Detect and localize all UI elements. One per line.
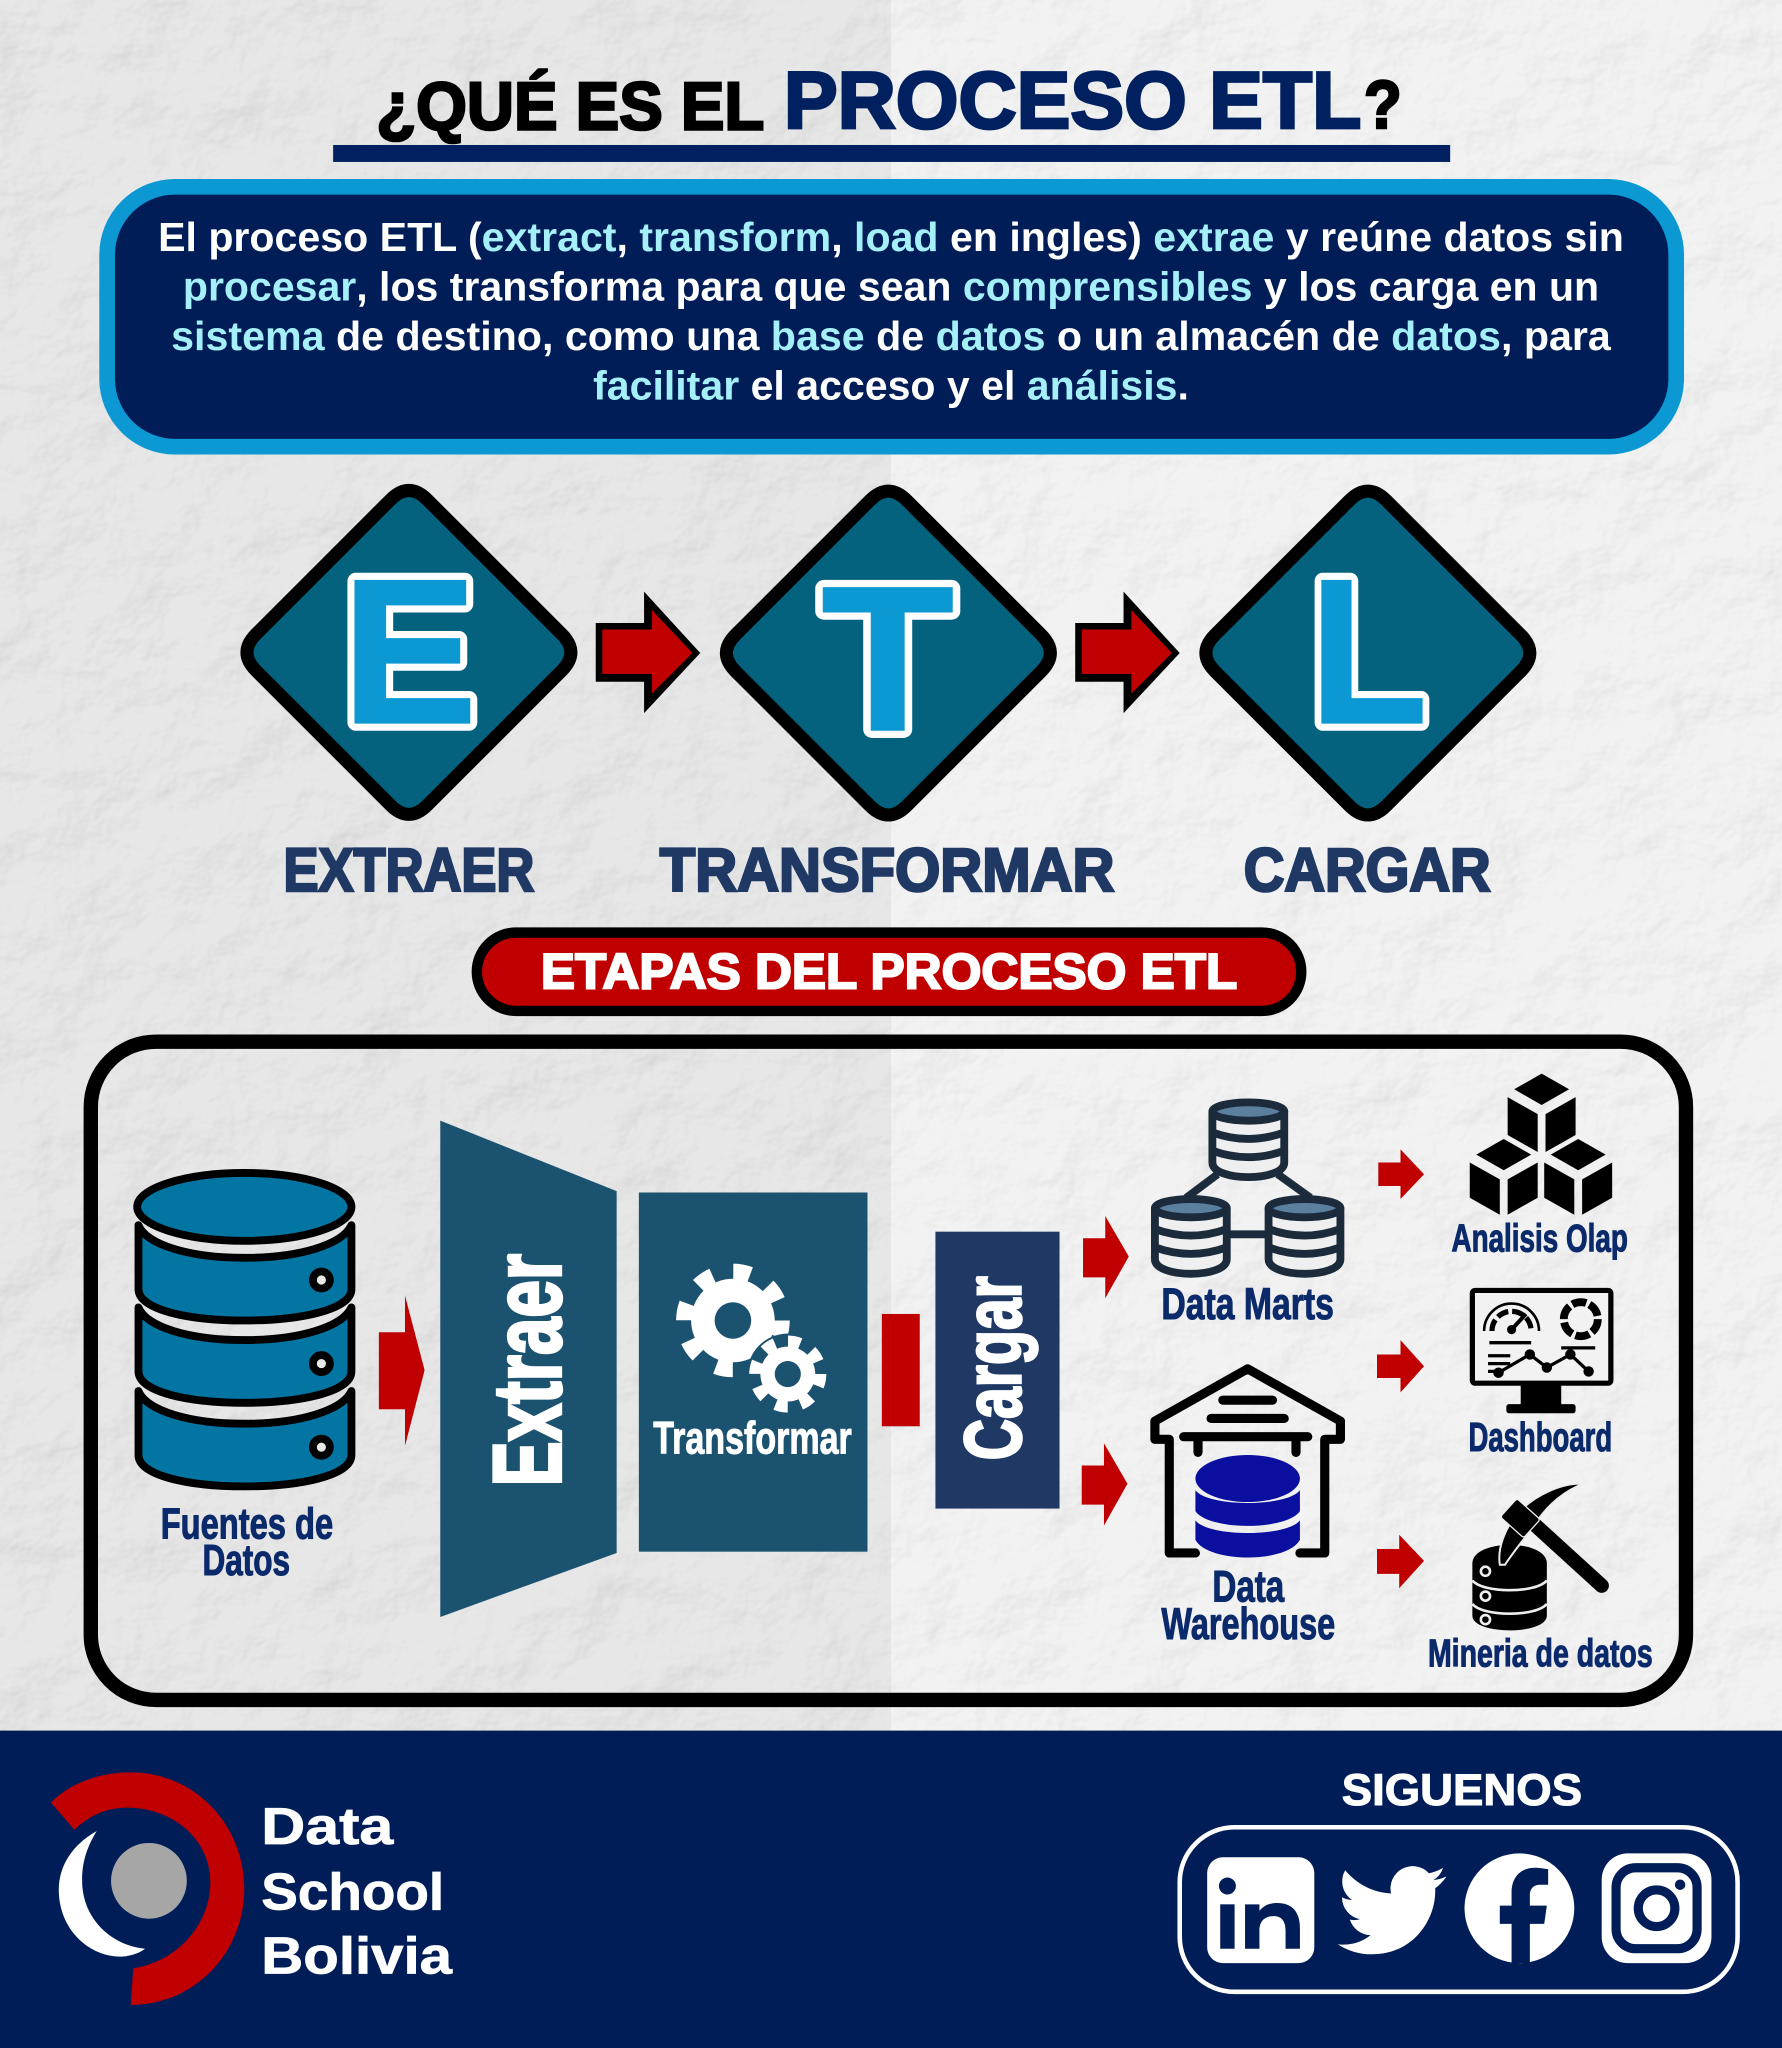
diamond L: L [1310,537,1427,766]
definition text: procesar, los transforma para que sean comprensibles y los carga en un [183,263,1599,309]
footer band [0,1731,1782,2048]
definition text [158,214,1624,409]
icon: blue database [1195,1455,1300,1558]
label: fuentes de datos: Datos [202,1537,290,1585]
stage: extraer [440,1121,617,1617]
icon: instagram [1602,1853,1711,1963]
arrow: to data mining [1377,1535,1424,1588]
label: data warehouse: Warehouse [1161,1600,1335,1649]
panel: pipeline frame [91,1042,1686,1700]
label: fuentes de datos [161,1501,333,1585]
label: mineria de datos: Mineria de datos [1428,1633,1653,1676]
arrow: to data warehouse [1082,1443,1127,1526]
label: data marts: Data Marts [1161,1280,1334,1329]
diamond L: L [1310,537,1427,766]
icon: dashboard monitor [1472,1290,1611,1413]
logo [51,1772,244,2005]
diamond E [247,490,571,814]
connector block [882,1314,920,1426]
label: analisis olap: Analisis Olap [1451,1217,1628,1260]
icon: data mining pickaxe [1472,1484,1602,1630]
icon: facebook [1465,1853,1574,1963]
diamond E: E [342,537,477,766]
arrow: to dashboard [1377,1340,1424,1392]
panel: definition [107,187,1676,447]
title: PROCESO ETL [784,56,1361,146]
brand name: School [261,1864,444,1922]
arrow: sources to extract [379,1296,425,1446]
title underline [333,145,1450,162]
diamond T: T [822,544,954,773]
icon: source database [137,1173,351,1486]
arrow: to olap [1378,1149,1424,1199]
stage: extraer: Extraer [473,1254,581,1486]
heading: etapas [477,933,1301,1011]
title [376,56,1402,146]
heading: siguenos: SIGUENOS [1342,1766,1582,1815]
definition text: facilitar el acceso y el análisis. [593,363,1189,409]
stage: cargar: Cargar [948,1276,1038,1460]
diamond T: T [822,544,954,773]
arrow: T to L [1075,592,1180,713]
label: TRANSFORMAR: TRANSFORMAR [660,836,1114,905]
title: ¿QUÉ ES EL [376,68,764,144]
label: dashboard: Dashboard [1468,1414,1612,1460]
arrow: to data marts [1083,1216,1129,1298]
diamond E: E [342,537,477,766]
definition text: sistema de destino, como una base de datos o un almacén de datos, para [171,313,1611,359]
label: data warehouse: Data [1212,1562,1284,1611]
title: ? [1364,68,1402,143]
icon: linkedin [1207,1857,1314,1963]
icon: data marts [1155,1102,1340,1274]
label: CARGAR: CARGAR [1244,836,1491,905]
stage: transformar: Transformar [653,1413,852,1464]
brand name [261,1798,453,1986]
arrow: E to T [596,592,700,713]
label: fuentes de datos: Fuentes de [161,1501,333,1549]
icon: gears [685,1272,828,1415]
icon: data warehouse [1155,1369,1340,1558]
diamond T [726,491,1050,815]
icon: twitter [1338,1866,1446,1954]
stage: cargar [935,1232,1060,1509]
label: data warehouse [1161,1562,1335,1649]
social box [1180,1827,1738,1992]
label: EXTRAER: EXTRAER [284,836,534,905]
brand name: Bolivia [261,1928,453,1986]
diamond L [1206,491,1530,815]
heading: etapas: ETAPAS DEL PROCESO ETL [541,944,1237,1000]
brand name: Data [261,1798,394,1856]
definition text: El proceso ETL (extract, transform, load en ingles) extrae y reúne datos sin [158,214,1624,260]
icon: olap cubes [1470,1074,1612,1215]
stage: transformar [639,1192,867,1552]
